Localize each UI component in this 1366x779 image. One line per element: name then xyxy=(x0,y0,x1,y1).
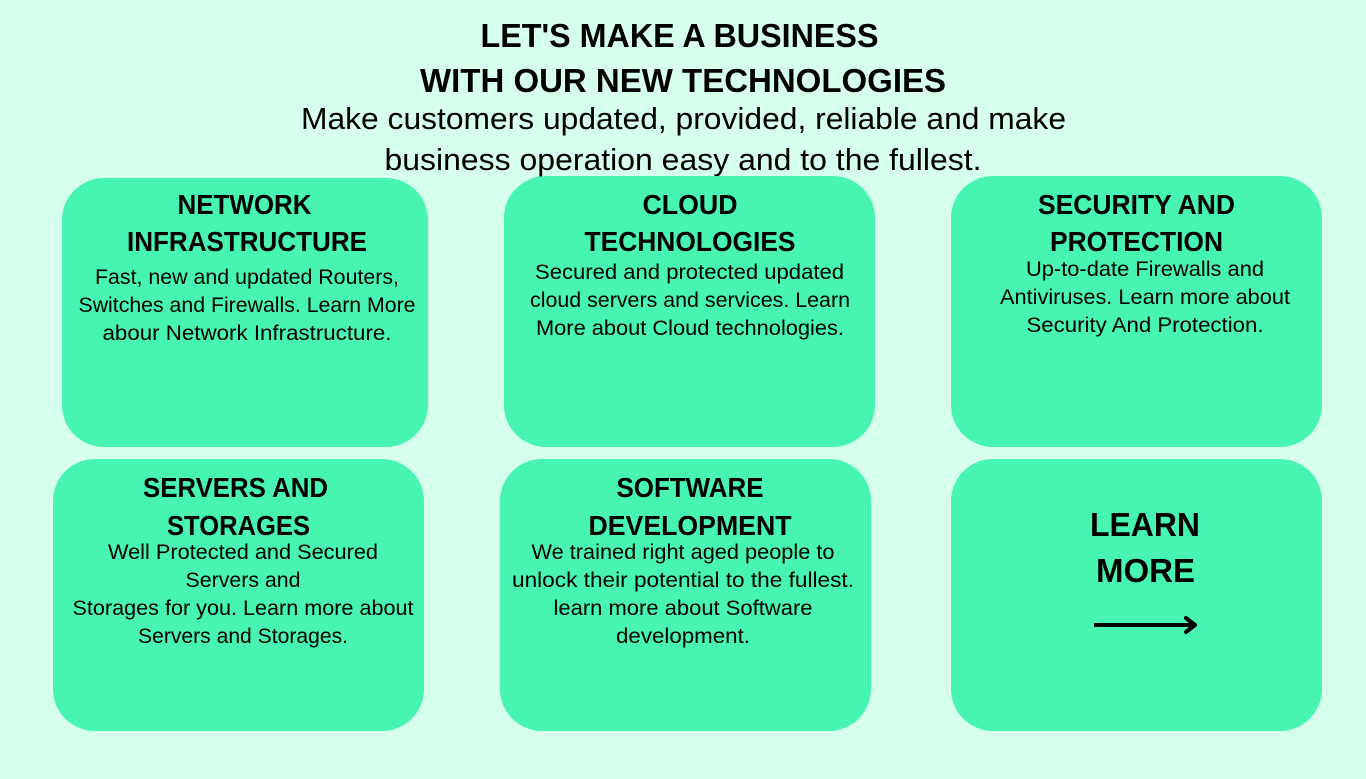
heading: security and protection xyxy=(1038,189,1235,257)
text: network infrastructure description xyxy=(78,266,416,345)
panel: software development xyxy=(500,459,871,731)
heading: cloud technologies: CLOUD xyxy=(642,189,738,220)
heading: learn more: LEARN xyxy=(1090,506,1200,543)
text: cloud technologies description xyxy=(530,261,850,340)
text: servers and storages description xyxy=(72,541,414,648)
heading: network infrastructure: INFRASTRUCTURE xyxy=(127,226,367,257)
panel: servers and storages xyxy=(53,459,424,731)
text: network infrastructure description: Fast, new and updated Routers, xyxy=(95,266,399,289)
text: servers and storages description: Well Protected and Secured xyxy=(108,541,378,564)
text: software development description: unlock their potential to the fullest. xyxy=(512,569,854,592)
text: software development description: learn more about Software xyxy=(554,597,812,620)
text: security and protection description: Up-to-date Firewalls and xyxy=(1026,258,1264,281)
heading: network infrastructure xyxy=(127,189,367,257)
heading: security and protection: PROTECTION xyxy=(1050,226,1223,257)
heading: security and protection: SECURITY AND xyxy=(1038,189,1235,220)
text: security and protection description xyxy=(1000,258,1290,337)
heading: software development xyxy=(588,472,792,541)
heading: servers and storages: SERVERS AND xyxy=(143,472,328,503)
text: network infrastructure description: abour Network Infrastructure. xyxy=(102,322,392,345)
text: security and protection description: Security And Protection. xyxy=(1026,314,1264,337)
text: cloud technologies description: Secured and protected updated xyxy=(535,261,844,284)
heading: cloud technologies: TECHNOLOGIES xyxy=(584,226,796,257)
panel: network infrastructure xyxy=(62,178,428,447)
heading: cloud technologies xyxy=(584,189,796,257)
subtitle: Make customers updated, provided, reliable and make xyxy=(301,101,1066,136)
title: WITH OUR NEW TECHNOLOGIES xyxy=(420,62,946,99)
text: network infrastructure description: Switches and Firewalls. Learn More xyxy=(78,294,416,317)
heading: servers and storages xyxy=(143,472,328,541)
text: cloud technologies description: cloud servers and services. Learn xyxy=(530,289,850,312)
text: servers and storages description: Servers and Storages. xyxy=(138,625,348,648)
panel: security and protection xyxy=(951,176,1322,447)
text: servers and storages description: Servers and xyxy=(186,569,300,592)
title xyxy=(420,17,946,99)
heading: learn more: MORE xyxy=(1096,552,1195,589)
heading: network infrastructure: NETWORK xyxy=(178,189,312,220)
text: security and protection description: Antiviruses. Learn more about xyxy=(1000,286,1290,309)
icon: arrow xyxy=(1094,618,1195,632)
panel: cloud technologies xyxy=(504,176,875,447)
text: software development description: development. xyxy=(616,625,750,648)
heading: software development: DEVELOPMENT xyxy=(588,510,792,541)
text: software development description: We trained right aged people to xyxy=(532,541,834,564)
subtitle xyxy=(301,101,1066,177)
heading: servers and storages: STORAGES xyxy=(167,510,310,541)
text: servers and storages description: Storages for you. Learn more about xyxy=(72,597,414,620)
subtitle: business operation easy and to the fullest. xyxy=(384,142,982,177)
heading: learn more xyxy=(1090,506,1200,589)
text: cloud technologies description: More about Cloud technologies. xyxy=(536,317,844,340)
title: LET'S MAKE A BUSINESS xyxy=(480,17,878,54)
text: software development description xyxy=(512,541,854,648)
panel: learn more xyxy=(951,459,1322,731)
heading: software development: SOFTWARE xyxy=(616,472,764,503)
